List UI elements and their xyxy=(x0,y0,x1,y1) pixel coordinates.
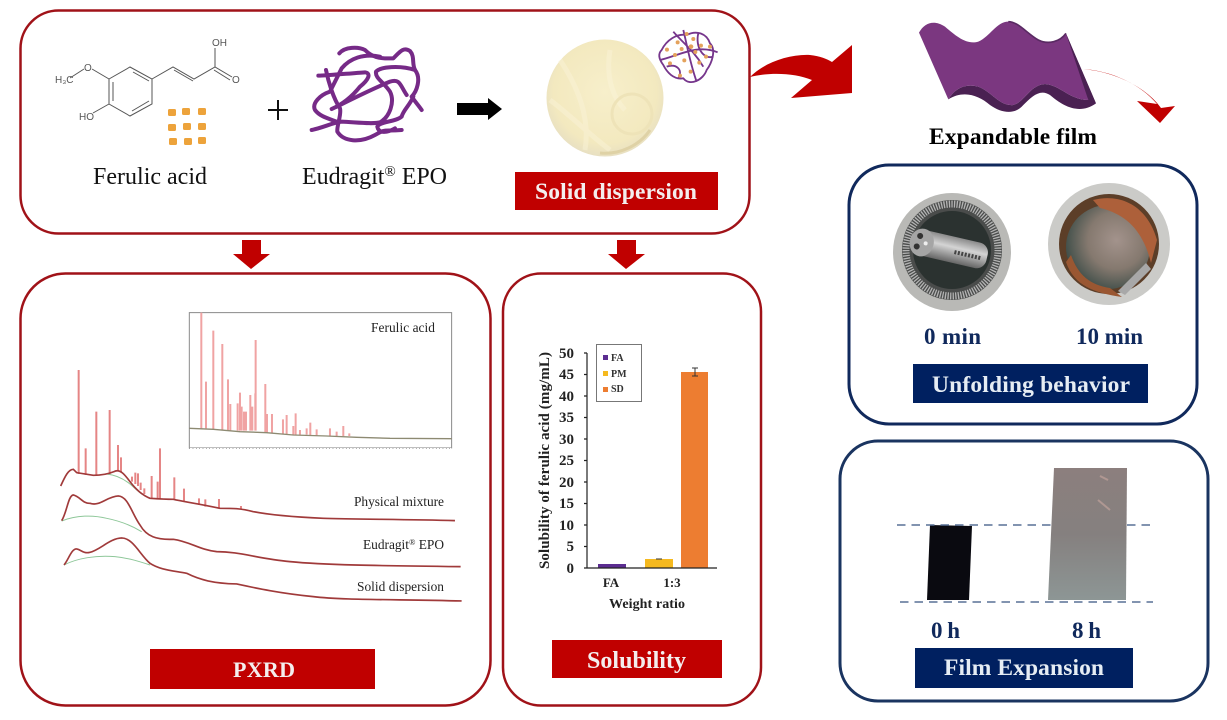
icon: drug particles xyxy=(168,108,206,145)
label: 10 min: 10 min xyxy=(1076,324,1143,349)
label: eudragit: EPO xyxy=(396,164,447,190)
trace: physical mixture xyxy=(61,370,455,521)
label: PXRD xyxy=(150,649,375,689)
y axis ticks: 25 xyxy=(559,453,574,469)
trace labels: EPO xyxy=(415,537,444,552)
arrow: process xyxy=(457,98,502,120)
x axis labels: 1:3 xyxy=(663,575,681,590)
y axis ticks: 15 xyxy=(559,496,574,512)
label: eudragit: ® xyxy=(384,164,396,180)
trace: eudragit xyxy=(62,495,461,567)
panel: formulation xyxy=(20,10,750,234)
y axis ticks: 0 xyxy=(566,561,574,577)
label: solubility xyxy=(552,640,722,678)
label: film expansion xyxy=(915,648,1133,688)
trace labels: ® xyxy=(409,537,416,547)
y axis ticks: 35 xyxy=(559,410,574,426)
y axis ticks: 5 xyxy=(566,539,574,555)
photo: unfolded film at 10 min xyxy=(1048,183,1170,305)
trace: solid dispersion xyxy=(64,538,462,601)
label: 8 h: 8 h xyxy=(1072,618,1101,643)
y axis ticks: 40 xyxy=(559,389,574,405)
chart: PXRD traces xyxy=(61,313,462,601)
label: 0 h: 0 h xyxy=(931,618,960,643)
label: unfolding behavior xyxy=(913,364,1148,403)
panel: unfolding behavior xyxy=(849,165,1197,424)
legend: PM xyxy=(611,369,627,380)
label: solid dispersion: Solid dispersion xyxy=(535,179,697,205)
icon: polymer with drug xyxy=(659,30,718,82)
molecule labels: O xyxy=(84,63,92,74)
inset: ferulic acid diffractogram xyxy=(189,313,452,448)
molecule labels: H₃C xyxy=(55,75,74,86)
photo: film at 0 h xyxy=(927,525,972,600)
label: PXRD: PXRD xyxy=(233,657,295,682)
arrow: film to tests xyxy=(1083,69,1175,123)
icon: polymer xyxy=(312,48,422,140)
trace labels xyxy=(354,320,444,594)
ferulic acid molecule xyxy=(70,48,232,116)
trace labels: Physical mixture xyxy=(354,494,444,509)
photo: film at 8 h xyxy=(1048,468,1127,600)
trace labels: Ferulic acid xyxy=(371,320,435,335)
trace labels: Eudragit xyxy=(363,537,409,552)
label: 0 min: 0 min xyxy=(924,324,981,349)
label: solubility: Solubility xyxy=(587,648,686,674)
molecule labels: O xyxy=(232,75,240,86)
molecule labels: HO xyxy=(79,112,94,123)
photo: capsule at 0 min xyxy=(893,193,1011,311)
panel: PXRD xyxy=(20,274,490,706)
icon: expandable film xyxy=(919,22,1096,112)
molecule labels: OH xyxy=(212,38,227,49)
solid dispersion disc xyxy=(546,40,664,156)
label: ferulic acid: Ferulic acid xyxy=(93,164,207,190)
x axis title: Weight ratio xyxy=(609,597,685,612)
y axis ticks: 20 xyxy=(559,475,574,491)
panel: solubility xyxy=(503,274,761,706)
y axis title: Solubility of ferulic acid (mg/mL) xyxy=(537,352,553,569)
arrow: to film xyxy=(750,45,852,98)
x axis labels: FA xyxy=(603,575,620,590)
trace labels: Solid dispersion xyxy=(357,579,444,594)
legend: FA xyxy=(611,353,624,364)
chart: solubility bars xyxy=(537,344,717,612)
y axis ticks: 45 xyxy=(559,367,574,383)
y axis ticks: 10 xyxy=(559,518,574,534)
x axis labels xyxy=(603,575,681,590)
legend xyxy=(596,344,642,402)
y axis ticks: 30 xyxy=(559,432,574,448)
label: expandable film: Expandable film xyxy=(929,124,1097,150)
label: film expansion: Film Expansion xyxy=(944,655,1104,681)
y axis ticks xyxy=(559,346,574,577)
label: solid dispersion xyxy=(515,172,718,210)
molecule labels xyxy=(55,38,240,123)
legend: SD xyxy=(611,384,624,395)
arrow: to PXRD xyxy=(233,240,270,269)
plus sign xyxy=(268,100,288,120)
label: eudragit: Eudragit xyxy=(302,164,384,190)
arrow: to solubility xyxy=(608,240,645,269)
y axis ticks: 50 xyxy=(559,346,574,362)
panel: film expansion xyxy=(840,441,1208,701)
label: unfolding behavior: Unfolding behavior xyxy=(932,372,1130,398)
